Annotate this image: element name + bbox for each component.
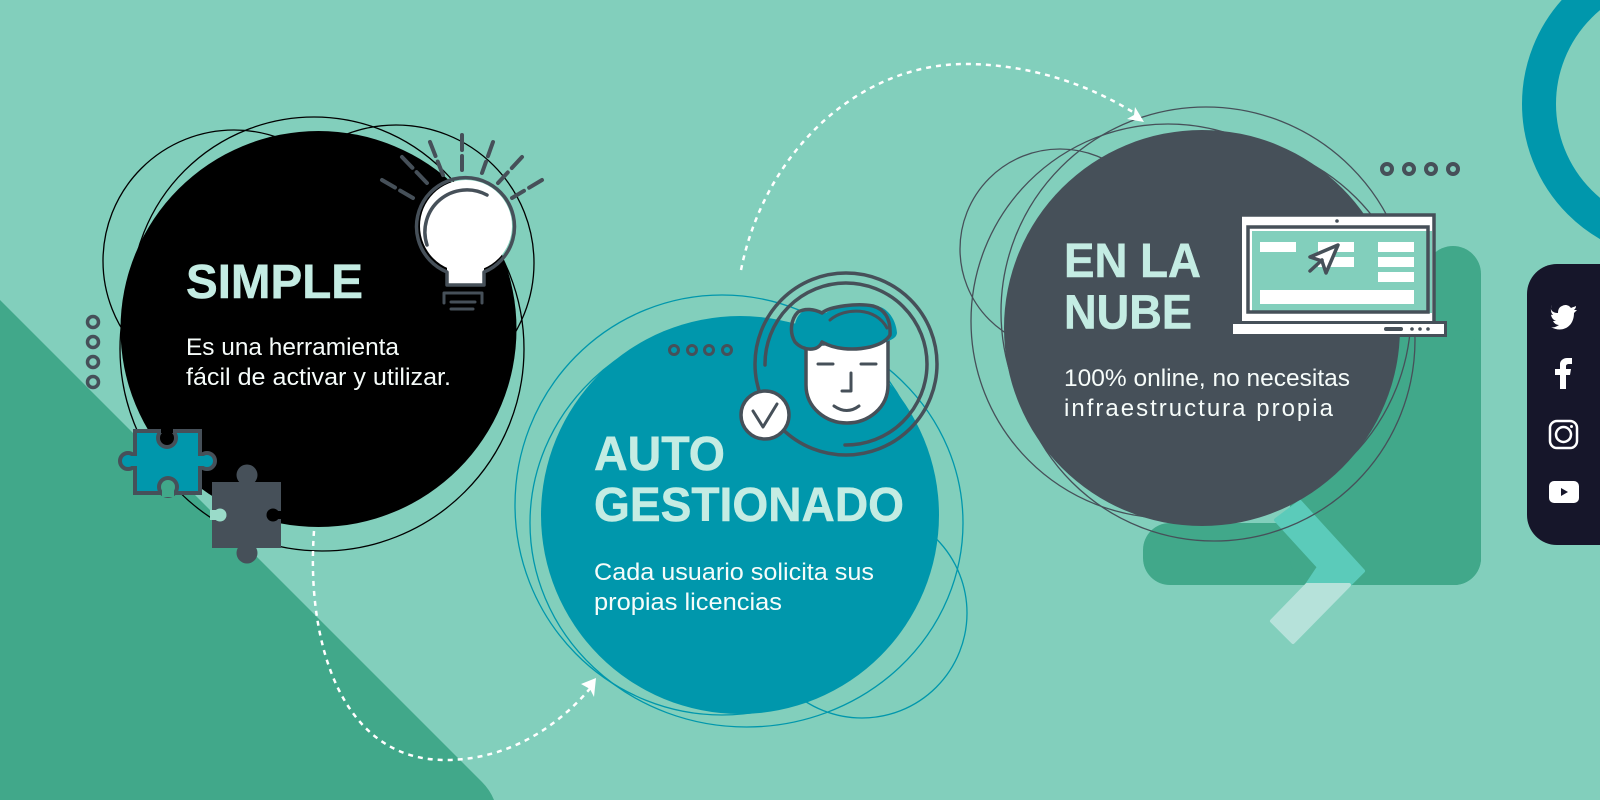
text: en la nube description: infraestructura propia: [1064, 395, 1334, 422]
icon: four dots, left: [88, 316, 98, 388]
icon: youtube: [1549, 481, 1579, 503]
icon: dark puzzle piece: [210, 464, 283, 564]
heading: en la nube: NUBE: [1064, 286, 1192, 340]
slate circle: [1004, 130, 1400, 526]
panel: en la nube: [960, 107, 1458, 541]
icon: light bulb: [382, 135, 542, 309]
text: autogestionado description: Cada usuario solicita sus: [594, 559, 874, 586]
text: simple description: Es una herramienta: [186, 334, 400, 361]
outline circles: autogestionado: [515, 295, 967, 727]
icon: check badge: [741, 391, 789, 439]
outline circles: simple: [103, 117, 534, 551]
icon: user face: [755, 273, 937, 455]
outline circles: en la nube: [960, 107, 1415, 541]
heading: autogestionado: AUTO: [594, 428, 725, 481]
background green rounded shape: [1143, 246, 1481, 585]
top right teal ring: [1539, 0, 1600, 243]
text: simple description: fácil de activar y utilizar.: [186, 364, 451, 391]
icon: four dots, centre: [670, 346, 732, 354]
text: autogestionado description: propias licencias: [594, 589, 782, 616]
background triangle: [0, 300, 494, 800]
panel: autogestionado: [515, 273, 967, 727]
heading: autogestionado: GESTIONADO: [594, 479, 904, 532]
icon: twitter: [1551, 305, 1577, 329]
arrow: autogestionado to en la nube: [741, 64, 1144, 270]
icon: facebook: [1555, 358, 1572, 389]
teal circle: [541, 316, 939, 714]
panel: simple: [88, 117, 542, 564]
black circle: [120, 131, 516, 527]
arrow: simple to autogestionado: [313, 531, 596, 760]
text: en la nube description: 100% online, no necesitas: [1064, 365, 1350, 392]
heading: simple: SIMPLE: [186, 256, 363, 309]
heading: en la nube: EN LA: [1064, 235, 1201, 288]
icon: laptop: [1232, 215, 1446, 336]
icon: instagram: [1550, 421, 1577, 448]
icon: four dots, right: [1382, 164, 1458, 174]
panel: social bar: [1527, 264, 1600, 545]
icon: teal puzzle piece: [120, 427, 215, 498]
background chevron: [1272, 502, 1363, 642]
